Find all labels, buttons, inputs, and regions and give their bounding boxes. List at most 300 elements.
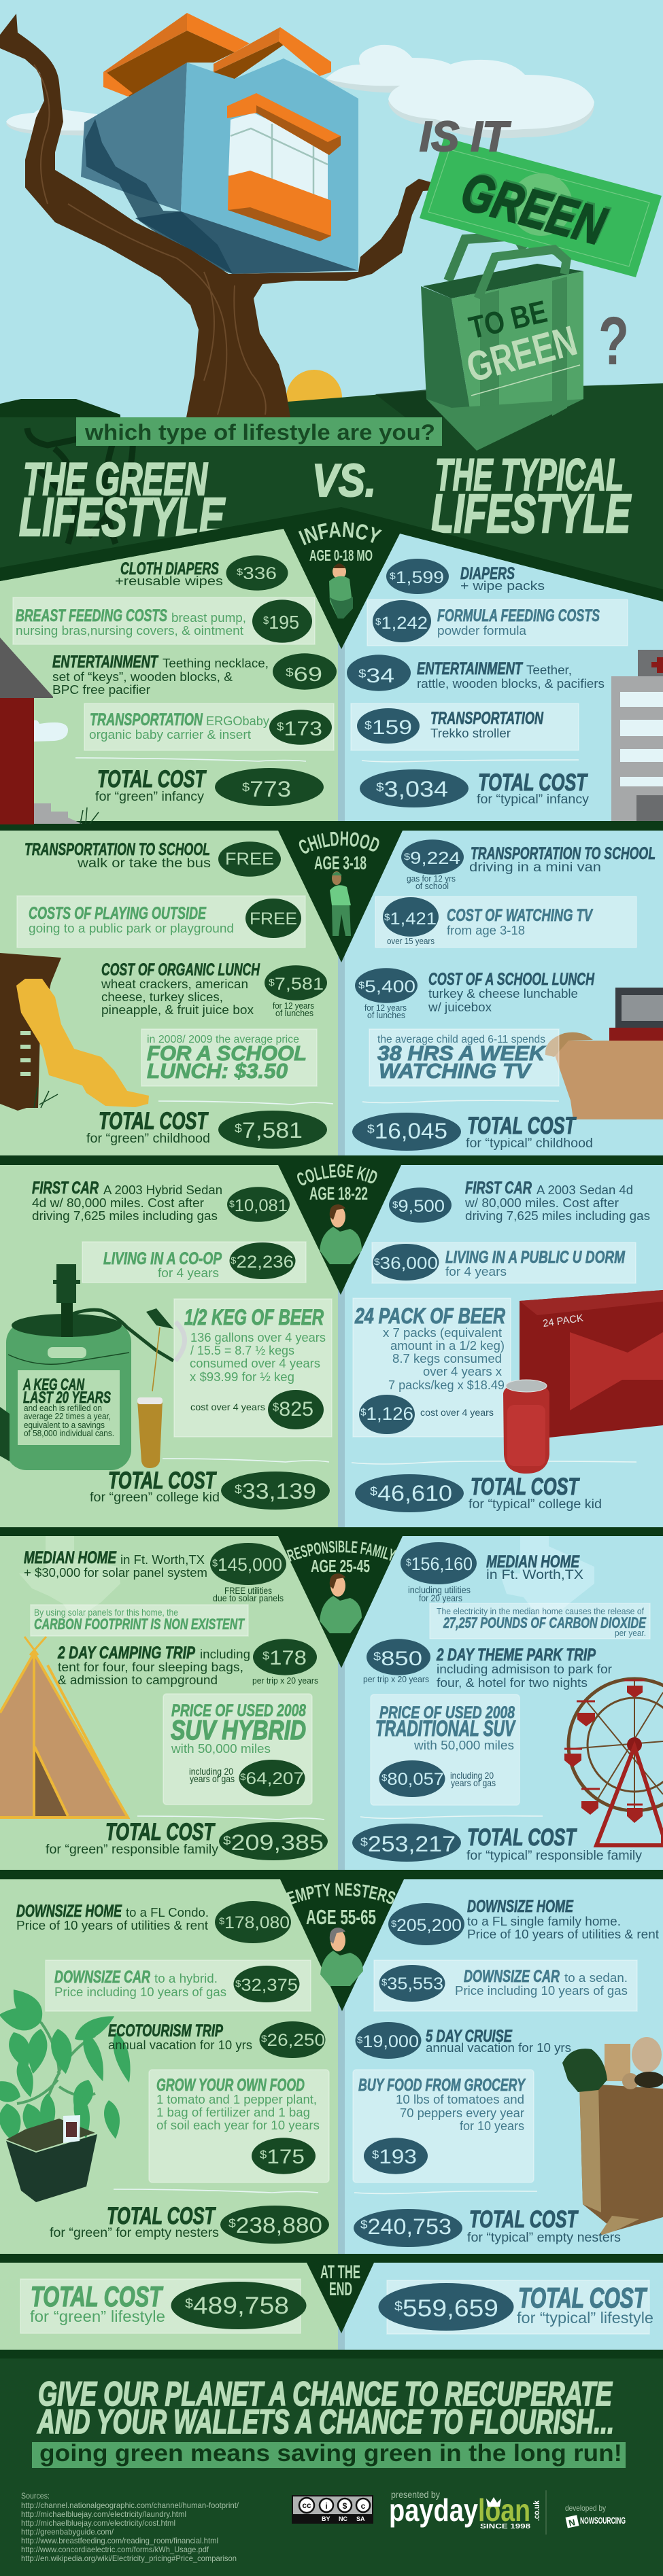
total: green college kid: TOTAL COST — [108, 1467, 217, 1494]
sources list: http://channel.nationalgeographic.com/channel/human-footprint/ — [21, 2501, 239, 2510]
item: first car green: 10,081 — [235, 1196, 288, 1215]
subtitle banner: which type of lifestyle are you? — [84, 420, 435, 445]
keg label: and each is refilled on — [24, 1404, 102, 1413]
item: entertainment green: 69 — [294, 663, 322, 686]
total: typical empty nesters: TOTAL COST — [469, 2206, 579, 2233]
item: transportation typical: Trekko stroller — [430, 727, 511, 740]
creative commons badge — [292, 2495, 373, 2524]
item: entertainment typical: $ — [358, 668, 366, 680]
item: first car typical: $ — [392, 1200, 398, 1210]
developed by nowsourcing logo: developed by — [565, 2503, 606, 2513]
item: downsize car green: DOWNSIZE CAR — [54, 1968, 150, 1987]
item: median home typical: MEDIAN HOME — [486, 1552, 580, 1571]
item: downsize car typical: to a sedan. — [564, 1971, 628, 1985]
item: 24 pack of beer: x 7 packs (equivalent — [383, 1326, 502, 1340]
total: green infancy: 773 — [250, 777, 291, 801]
item: watching tv: $ — [384, 912, 390, 922]
item: downsize home green: 178,080 — [224, 1913, 290, 1932]
total: typical infancy — [360, 769, 590, 807]
item: watching tv — [375, 897, 636, 947]
grand total: typical lifestyle — [378, 2280, 653, 2334]
item: downsize car green: $ — [235, 1979, 241, 1989]
item: 5 day cruise: $ — [357, 2035, 363, 2045]
item: transportation green: $ — [277, 721, 284, 733]
item: diapers: + wipe packs — [460, 579, 545, 593]
total: typical responsible family: TOTAL COST — [467, 1824, 577, 1851]
item: watching tv: from age 3-18 — [447, 924, 525, 937]
item: first car typical: driving 7,625 miles including gas — [465, 1209, 650, 1223]
section: responsible family — [0, 1536, 663, 1879]
total: typical childhood — [352, 1113, 593, 1151]
item: transportation to school green: TRANSPORTATION TO SCHOOL — [24, 840, 210, 859]
item: grow your own food: 1 bag of fertilizer and 1 bag — [156, 2106, 310, 2119]
total: typical childhood: TOTAL COST — [467, 1113, 577, 1139]
item: diapers: 1,599 — [396, 568, 444, 587]
item: first car green: $ — [229, 1199, 235, 1209]
item: theme park trip — [363, 1639, 612, 1690]
age banner: childhood: CHILDHOOD — [299, 831, 379, 854]
total: typical childhood: 16,045 — [375, 1119, 447, 1143]
item: transportation to school typical: of school — [415, 881, 449, 891]
heading: the green lifestyle: THE GREEN — [23, 453, 208, 505]
item: cloth diapers: CLOTH DIAPERS — [120, 559, 219, 578]
total: green college kid: $ — [235, 1482, 242, 1496]
item: downsize home green: Price of 10 years of utilities & rent — [16, 1919, 208, 1932]
item: costs of playing outside: FREE — [250, 909, 297, 928]
age banner: empty nesters: EMPTY NESTERS — [286, 1883, 396, 1904]
item: transportation to school typical: 9,224 — [410, 849, 460, 868]
item: 5 day cruise: annual vacation for 10 yrs — [426, 2041, 571, 2055]
item: traditional suv: TRADITIONAL SUV — [375, 1716, 516, 1741]
item: 24 pack of beer: 1,126 — [367, 1404, 413, 1424]
icon: college student — [320, 1204, 362, 1264]
sources list: Sources: — [21, 2491, 50, 2501]
total: green college kid — [90, 1467, 330, 1510]
presented by payday loan logo: payday — [389, 2492, 478, 2528]
item: suv hybrid: PRICE OF USED 2008 — [171, 1701, 306, 1720]
item: buy food from grocery: BUY FOOD FROM GROCERY — [358, 2076, 526, 2095]
total: green empty nesters — [50, 2203, 329, 2244]
creative commons badge: $ — [343, 2501, 347, 2511]
item: transportation green: ERGObaby — [206, 714, 269, 728]
item: suv hybrid: with 50,000 miles — [171, 1742, 271, 1756]
total: typical responsible family: $ — [360, 1835, 368, 1849]
item: entertainment green: set of “keys”, wooden blocks, & — [52, 670, 233, 684]
grand total: green lifestyle: TOTAL COST — [31, 2280, 163, 2312]
item: entertainment green: BPC free pacifier — [52, 683, 150, 697]
item: median home green: 145,000 — [218, 1554, 282, 1575]
item: school lunch: 5,400 — [364, 977, 415, 996]
item: grow your own food: 175 — [267, 2146, 305, 2168]
item: camping trip: per trip x 20 years — [252, 1675, 318, 1686]
item: entertainment typical: rattle, wooden blocks, & pacifiers — [417, 677, 605, 691]
item: traditional suv: including 20 — [450, 1770, 494, 1781]
developed by nowsourcing logo: N — [568, 2517, 576, 2528]
item: first car typical: FIRST CAR — [465, 1179, 532, 1198]
item: school lunch: w/ juicebox — [428, 1000, 492, 1014]
item: suv hybrid: 64,207 — [246, 1769, 304, 1788]
section: at the end — [0, 2261, 663, 2359]
item: cloth diapers — [115, 555, 288, 591]
item: median home green: MEDIAN HOME — [24, 1548, 117, 1567]
closing banner: going green means saving green in the long run! — [39, 2440, 622, 2467]
item: median home typical: 156,160 — [411, 1554, 473, 1574]
item: costs of playing outside: COSTS OF PLAYING OUTSIDE — [29, 904, 207, 923]
item: formula feeding: FORMULA FEEDING COSTS — [437, 606, 600, 625]
age banner: college kid: AGE 18-22 — [309, 1183, 368, 1204]
item: median home typical — [401, 1542, 583, 1603]
item: half keg of beer: x $93.99 for ½ keg — [190, 1370, 294, 1384]
item: first car green: 4d w/ 80,000 miles. Cost after — [32, 1196, 204, 1210]
sources list: http://greenbabyguide.com/ — [21, 2527, 114, 2537]
item: 24 pack of beer: over 4 years x — [423, 1365, 502, 1378]
item: median home green — [24, 1543, 286, 1603]
total: green empty nesters: for “green” for empty nesters — [50, 2226, 219, 2240]
item: half keg of beer: $ — [273, 1402, 279, 1414]
item: first car typical: 9,500 — [398, 1197, 445, 1216]
item: downsize car green — [46, 1960, 311, 2011]
item: grow your own food: of soil each year for 10 years — [156, 2119, 320, 2132]
item: cloth diapers: +reusable wipes — [115, 574, 223, 588]
total: green infancy: for “green” infancy — [95, 790, 205, 804]
item: school lunch: for 12 years — [364, 1003, 407, 1013]
item: transportation to school typical: driving in a mini van — [469, 860, 601, 875]
total: green empty nesters: 238,880 — [236, 2213, 322, 2238]
callout: hours of tv: the average child aged 6-11 spends — [377, 1034, 545, 1045]
item: downsize home typical — [388, 1897, 659, 1945]
item: entertainment green: $ — [286, 667, 294, 679]
texas map blue — [500, 1536, 594, 1624]
footer panel — [0, 2359, 663, 2576]
item: breast feeding: nursing bras,nursing covers, & ointment — [16, 624, 243, 638]
item: downsize home typical: $ — [391, 1919, 396, 1929]
total: typical infancy: 3,034 — [384, 777, 448, 801]
section: infancy — [0, 507, 663, 831]
item: half keg of beer — [174, 1299, 332, 1437]
item: traditional suv: years of gas — [451, 1777, 496, 1788]
item: camping trip: tent for four, four sleeping bags, — [58, 1660, 243, 1674]
age banner: at the end: AT THE — [320, 2261, 360, 2282]
total: green responsible family: for “green” responsible family — [46, 1843, 219, 1857]
item: watching tv: over 15 years — [387, 936, 435, 946]
item: traditional suv: PRICE OF USED 2008 — [379, 1703, 515, 1722]
total: typical college kid: $ — [370, 1484, 377, 1498]
item: buy food from grocery: 70 peppers every year — [400, 2106, 524, 2120]
item: downsize car typical — [374, 1960, 637, 2011]
ferris wheel illustration — [564, 1679, 663, 1845]
item: breast feeding: $ — [263, 615, 269, 627]
total: green childhood: $ — [235, 1121, 242, 1135]
item: costs of playing outside: going to a public park or playground — [29, 922, 234, 935]
total: typical college kid: for “typical” college kid — [469, 1497, 602, 1512]
callout: carbon dioxide: per year. — [615, 1628, 646, 1638]
total: green childhood: 7,581 — [242, 1118, 303, 1143]
texas map green — [19, 1536, 120, 1631]
sources list — [21, 2491, 239, 2563]
callout: carbon dioxide — [430, 1603, 650, 1639]
item: formula feeding — [367, 599, 628, 646]
beer can illustration — [503, 1380, 549, 1474]
item: suv hybrid — [163, 1694, 312, 1805]
item: organic lunch: $ — [269, 977, 275, 988]
item: median home green: + $30,000 for solar panel system — [24, 1566, 207, 1580]
total: green empty nesters: TOTAL COST — [107, 2203, 216, 2229]
item: downsize home green: to a FL Condo. — [126, 1906, 209, 1919]
callout: carbon footprint: CARBON FOOTPRINT IS NON EXISTENT — [34, 1616, 245, 1633]
sources list: http://www.concordiaelectric.com/forms/kWh_Usage.pdf — [21, 2545, 209, 2554]
title: to be: TO BE — [466, 294, 550, 345]
presented by payday loan logo — [389, 2489, 541, 2530]
item: transportation to school green: FREE — [225, 850, 274, 869]
keg label: LAST 20 YEARS — [23, 1389, 111, 1407]
grand total: typical lifestyle: for “typical” lifestyle — [517, 2309, 653, 2327]
developed by nowsourcing logo: NOWSOURCING — [580, 2515, 626, 2526]
item: median home typical: $ — [406, 1557, 411, 1568]
total: green childhood: TOTAL COST — [99, 1108, 209, 1134]
item: public dorm: for 4 years — [445, 1265, 507, 1278]
item: entertainment green: Teething necklace, — [163, 657, 269, 670]
clouds — [6, 45, 594, 138]
item: diapers: $ — [390, 571, 396, 581]
tent illustration — [0, 1637, 129, 1818]
grand total: green lifestyle: 489,758 — [193, 2293, 289, 2319]
item: organic lunch: for 12 years — [273, 1000, 314, 1011]
creative commons badge: SA — [356, 2516, 365, 2522]
item: buy food from grocery — [353, 2070, 534, 2182]
grand total: green lifestyle: for “green” lifestyle — [30, 2308, 165, 2325]
item: first car green — [32, 1179, 290, 1223]
item: organic lunch: of lunches — [275, 1008, 313, 1018]
title: green on bag: GREEN — [462, 317, 582, 391]
item: traditional suv: $ — [381, 1773, 388, 1783]
item: costs of playing outside — [17, 896, 305, 947]
heading: the green lifestyle — [19, 453, 226, 547]
item: first car green: FIRST CAR — [32, 1179, 99, 1198]
item: buy food from grocery: 10 lbs of tomatoes and — [396, 2093, 524, 2106]
total: typical empty nesters: for “typical” empty nesters — [467, 2231, 621, 2245]
age banner: responsible family — [286, 1540, 396, 1633]
callout: hours of tv — [369, 1029, 559, 1086]
section: childhood — [0, 831, 663, 1165]
hill — [288, 383, 663, 435]
item: organic lunch — [101, 960, 327, 1018]
section: empty nesters — [0, 1879, 663, 2263]
icon: parent — [320, 1573, 362, 1633]
item: suv hybrid: including 20 — [189, 1766, 233, 1777]
total: green empty nesters: $ — [228, 2216, 236, 2230]
presented by payday loan logo: presented by — [391, 2489, 440, 2500]
creative commons badge: NC — [339, 2516, 347, 2522]
item: formula feeding: powder formula — [437, 624, 527, 638]
presented by payday loan logo: .co.uk — [532, 2501, 541, 2521]
total: typical responsible family: for “typical” responsible family — [466, 1849, 643, 1863]
callout: hours of tv: WATCHING TV — [379, 1059, 532, 1083]
item: organic lunch: cheese, turkey slices, — [101, 990, 223, 1004]
icon: child — [330, 871, 351, 936]
sources list: http://en.wikipedia.org/wiki/Electricity_pricing#Price_comparison — [21, 2554, 237, 2563]
item: 5 day cruise: 19,000 — [362, 2032, 419, 2051]
item: breast feeding — [13, 597, 315, 644]
total: typical college kid: 46,610 — [377, 1481, 452, 1505]
item: 5 day cruise: 5 DAY CRUISE — [426, 2027, 513, 2046]
item: grow your own food: 1 tomato and 1 pepper plant, — [156, 2093, 317, 2106]
item: breast feeding: BREAST FEEDING COSTS — [16, 606, 167, 625]
item: entertainment green: ENTERTAINMENT — [52, 652, 159, 672]
age banner: childhood — [299, 831, 379, 936]
item: half keg of beer: cost over 4 years — [190, 1402, 265, 1412]
item: camping trip: & admission to campground — [58, 1673, 218, 1687]
item: 24 pack of beer: 7 packs/keg x $18.49 — [388, 1378, 505, 1392]
age banner: infancy: INFANCY — [298, 522, 382, 545]
item: camping trip — [57, 1639, 318, 1687]
item: downsize home green: DOWNSIZE HOME — [16, 1902, 122, 1921]
item: transportation typical: $ — [364, 720, 372, 732]
keg label: average 22 times a year, — [24, 1412, 111, 1421]
grand total: green lifestyle: $ — [185, 2297, 193, 2311]
item: co-op: 22,236 — [236, 1253, 294, 1272]
item: organic lunch: wheat crackers, american — [101, 977, 248, 991]
item: school lunch: COST OF A SCHOOL LUNCH — [428, 970, 595, 989]
item: school lunch: $ — [358, 980, 365, 990]
item: grow your own food: GROW YOUR OWN FOOD — [156, 2076, 305, 2095]
total: typical infancy: TOTAL COST — [478, 769, 588, 796]
tree roots — [27, 428, 133, 544]
item: half keg of beer: 136 gallons over 4 years — [190, 1331, 326, 1344]
item: transportation to school green: walk or take the bus — [77, 856, 211, 871]
icon: baby — [329, 563, 353, 619]
item: theme park trip: four, & hotel for two nights — [437, 1676, 588, 1690]
total: typical college kid — [355, 1474, 602, 1512]
item: 24 pack of beer: $ — [360, 1407, 367, 1418]
total: typical childhood: for “typical” childhood — [466, 1136, 593, 1151]
item: first car typical: w/ 80,000 miles. Cost after — [464, 1196, 619, 1210]
24 pack box illustration: 24 PACK — [542, 1312, 584, 1329]
item: organic lunch: 7,581 — [275, 975, 324, 994]
item: median home green: FREE utilities — [224, 1585, 272, 1596]
presented by payday loan logo: SINCE 1998 — [480, 2523, 531, 2530]
item: transportation to school green — [24, 840, 281, 877]
item: watching tv: 1,421 — [390, 909, 437, 928]
item: median home green: due to solar panels — [213, 1592, 284, 1603]
heading: the green lifestyle: LIFESTYLE — [19, 487, 226, 547]
item: first car typical — [389, 1179, 650, 1223]
creative commons badge: cc — [302, 2501, 311, 2510]
couch and tv illustration — [545, 988, 663, 1119]
section: college kid — [0, 1164, 663, 1536]
total: green infancy: $ — [242, 780, 250, 794]
title: Green: GREEN — [456, 161, 612, 256]
item: camping trip: $ — [262, 1650, 269, 1663]
item: transportation to school typical: gas for 12 yrs — [407, 873, 456, 884]
age banner: at the end: END — [329, 2278, 352, 2299]
item: suv hybrid: SUV HYBRID — [171, 1716, 306, 1745]
item: entertainment green — [52, 652, 337, 697]
item: median home green: $ — [212, 1558, 218, 1569]
item: downsize home typical: DOWNSIZE HOME — [467, 1897, 574, 1916]
item: transportation green: organic baby carrier & insert — [89, 728, 251, 742]
item: school lunch: of lunches — [367, 1010, 405, 1020]
item: entertainment typical: ENTERTAINMENT — [417, 659, 524, 678]
item: downsize car green: 32,375 — [241, 1976, 298, 1995]
keg illustration — [0, 1264, 185, 1470]
total: green childhood: for “green” childhood — [86, 1132, 210, 1146]
item: median home typical: in Ft. Worth,TX — [486, 1568, 583, 1582]
callout: school lunch price: in 2008/ 2009 the average price — [147, 1034, 299, 1045]
playground slide illustration — [0, 953, 149, 1111]
age banner: childhood: AGE 3-18 — [314, 852, 367, 873]
item: co-op: for 4 years — [158, 1266, 219, 1280]
sources list: http://www.breastfeeding.com/reading_room/financial.html — [21, 2536, 218, 2545]
item: entertainment typical: 34 — [366, 665, 394, 687]
developed by nowsourcing logo — [565, 2503, 626, 2528]
creative commons badge: i — [325, 2501, 328, 2511]
item: theme park trip: $ — [373, 1651, 381, 1663]
callout: school lunch price: FOR A SCHOOL — [147, 1041, 307, 1065]
grand total: green lifestyle — [20, 2279, 306, 2333]
callout: carbon footprint — [31, 1605, 248, 1636]
item: 24 pack of beer: cost over 4 years — [420, 1407, 494, 1418]
total: typical empty nesters — [354, 2206, 621, 2247]
grand total: typical lifestyle: 559,659 — [403, 2295, 498, 2322]
item: co-op: LIVING IN A CO-OP — [103, 1249, 222, 1268]
age banner: empty nesters: AGE 55-65 — [306, 1905, 376, 1929]
total: green responsible family: TOTAL COST — [105, 1819, 216, 1845]
item: 24 pack of beer: 24 PACK OF BEER — [354, 1304, 505, 1328]
total: typical empty nesters: 240,753 — [367, 2214, 452, 2239]
age banner: responsible family: AGE 25-45 — [311, 1556, 370, 1576]
question mark: ? — [598, 303, 629, 379]
total: typical childhood: $ — [367, 1122, 375, 1136]
item: downsize car typical: $ — [381, 1977, 388, 1987]
creative commons badge: BY — [322, 2516, 330, 2522]
closing message — [37, 2375, 614, 2441]
item: traditional suv: 80,057 — [387, 1770, 444, 1789]
item: theme park trip: 2 DAY THEME PARK TRIP — [436, 1646, 596, 1665]
item: buy food from grocery: for 10 years — [460, 2119, 524, 2133]
item: public dorm: $ — [374, 1257, 380, 1267]
keg label: of 58,000 individual cans. — [24, 1429, 114, 1438]
total: green infancy — [95, 766, 324, 806]
item: half keg of beer: 825 — [279, 1398, 313, 1421]
item: downsize car typical: 35,553 — [387, 1974, 443, 1994]
item: suv hybrid: years of gas — [190, 1773, 235, 1784]
item: theme park trip: per trip x 20 years — [363, 1674, 429, 1684]
item: theme park trip: 850 — [381, 1648, 422, 1670]
sun — [286, 370, 342, 425]
header band background — [0, 417, 663, 612]
item: ecotourism trip: annual vacation for 10 yrs — [108, 2038, 252, 2052]
item: cloth diapers: 336 — [243, 564, 277, 583]
item: public dorm — [372, 1242, 636, 1283]
item: first car typical: A 2003 Sedan 4d — [537, 1183, 633, 1197]
tree — [0, 14, 454, 417]
24 pack box illustration — [520, 1290, 663, 1438]
item: organic lunch: COST OF ORGANIC LUNCH — [101, 960, 260, 979]
item: organic lunch: pineapple, & fruit juice box — [101, 1003, 254, 1017]
item: transportation typical: 159 — [372, 716, 412, 739]
item: median home green: in Ft. Worth,TX — [120, 1553, 205, 1567]
item: school lunch — [355, 968, 595, 1020]
item: half keg of beer: 1/2 KEG OF BEER — [184, 1305, 324, 1329]
item: co-op — [82, 1242, 306, 1283]
age banner: infancy — [298, 522, 382, 619]
item: camping trip: 2 DAY CAMPING TRIP — [57, 1643, 195, 1663]
heading: the typical lifestyle — [431, 449, 632, 544]
item: breast feeding: breast pump, — [171, 611, 246, 625]
callout: school lunch price: LUNCH: $3.50 — [147, 1059, 288, 1083]
age banner: empty nesters — [286, 1883, 396, 1986]
hospital illustration — [611, 650, 663, 821]
